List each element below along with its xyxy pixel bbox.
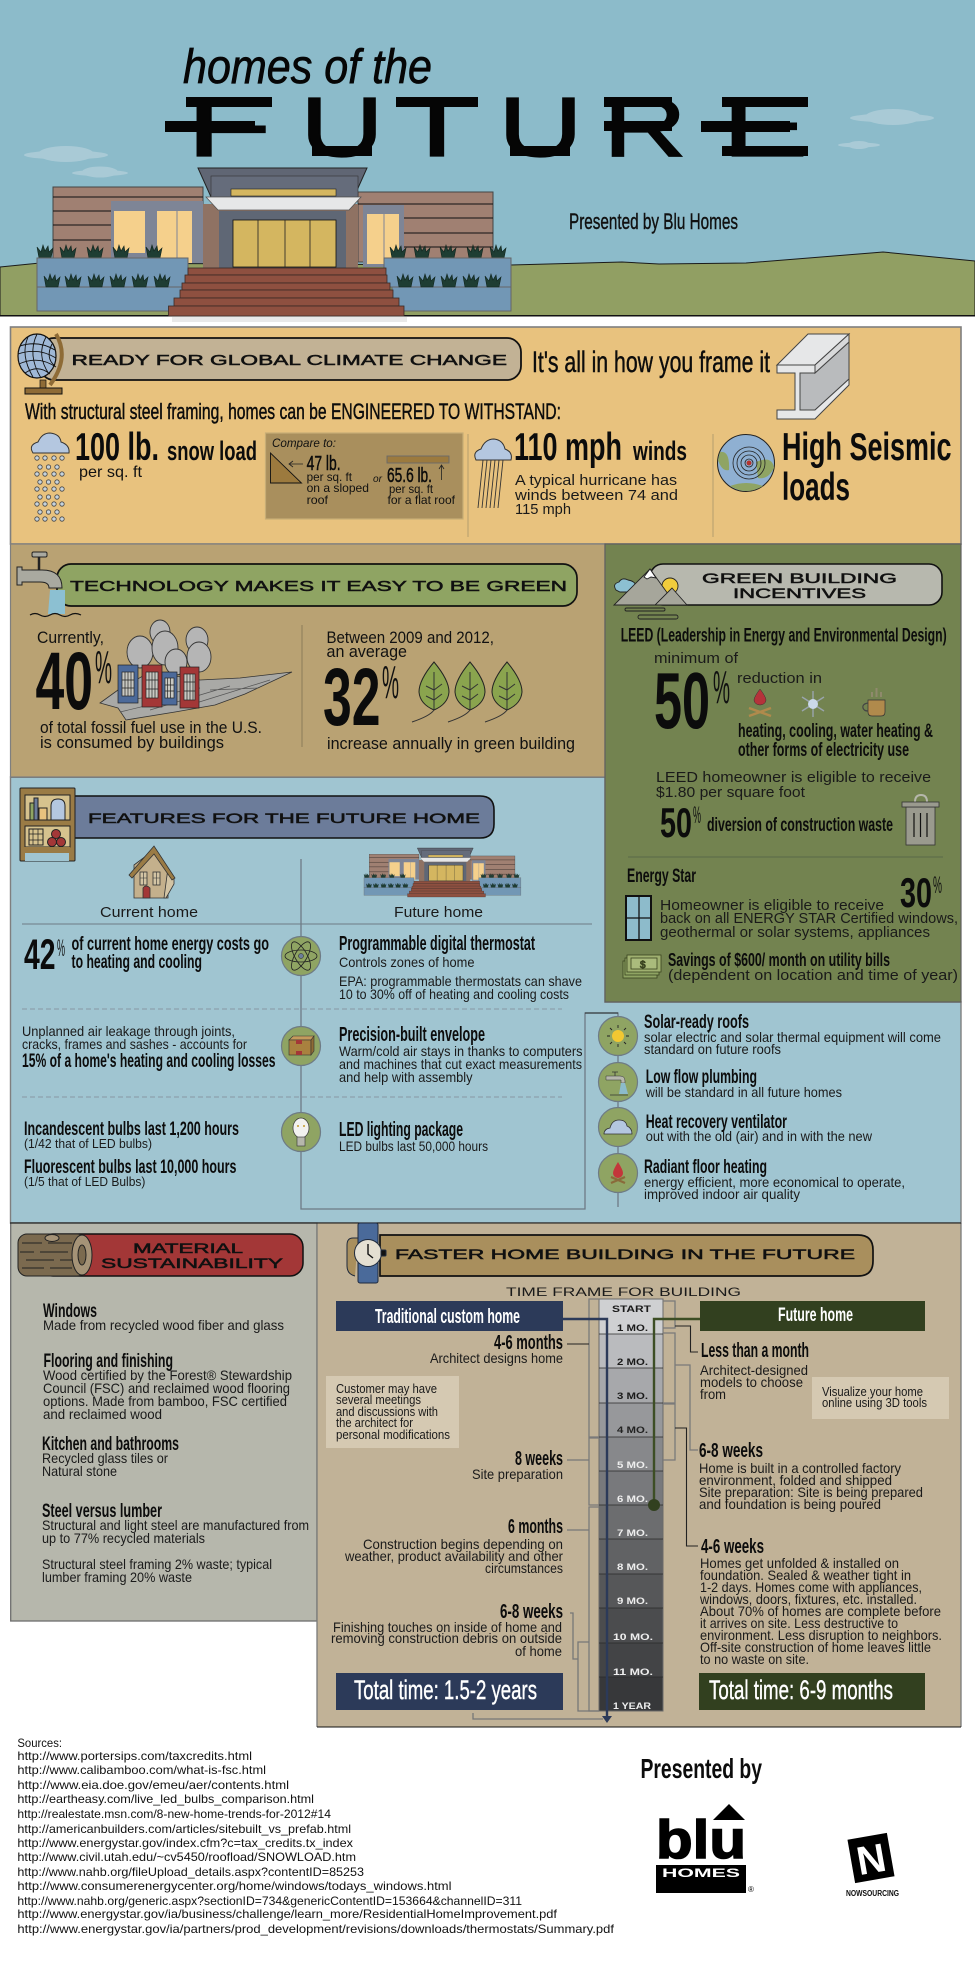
step: construction: Construction begins depending on [363, 1536, 563, 1552]
banner: green building incentives [650, 564, 942, 605]
logo: blu homes: blu [656, 1810, 746, 1870]
stat: 50 percent reduction: % [713, 661, 730, 713]
callout: customer meetings: Customer may have [336, 1381, 437, 1396]
stat: 32 percent green building: % [382, 656, 399, 708]
icon: snowflake [802, 691, 824, 717]
step: site preparation: 8 weeks [515, 1448, 563, 1470]
panel: technology makes it easy to be green [10, 544, 605, 777]
row: energy costs: % [57, 935, 65, 962]
step: factory build: Site preparation: Site is being prepared [699, 1484, 923, 1500]
feature: radiant floor heating: improved indoor air quality [644, 1186, 800, 1202]
row: air leakage: cracks, frames and sashes - accounts for [22, 1036, 247, 1052]
row: led lighting: LED bulbs last 50,000 hours [339, 1138, 488, 1154]
text: savings [668, 950, 958, 984]
icon: globe [18, 334, 62, 394]
item: flooring and finishing: options. Made from bamboo, FSC certified [43, 1393, 287, 1409]
item: flooring and finishing: Council (FSC) and reclaimed wood flooring [43, 1380, 290, 1396]
step: installation: foundation. Sealed & weather tight in [700, 1567, 911, 1583]
icon: fire [749, 689, 771, 716]
compare box: sloped vs flat roof: 65.6 lb. [387, 465, 432, 487]
energy star section: geothermal or solar systems, appliances [660, 924, 930, 941]
total time: traditional [336, 1673, 563, 1710]
row: thermostat: Controls zones of home [339, 954, 475, 970]
feature: heat recovery ventilator: Heat recovery ventilator [646, 1112, 787, 1133]
timeline column: 6 MO. [617, 1494, 648, 1504]
step: less than a month: from [700, 1386, 726, 1402]
item: kitchen and bathrooms [42, 1434, 179, 1479]
sources list [17, 1736, 615, 1936]
item: steel versus lumber: up to 77% recycled materials [42, 1530, 205, 1546]
icon: snow cloud [31, 433, 69, 521]
step: factory build: and foundation is being poured [699, 1496, 881, 1512]
step: installation: Off-site construction of home leaves little [700, 1639, 931, 1655]
compare box: sloped vs flat roof: Compare to: [272, 436, 336, 450]
tagline: It's all in how you frame it [532, 346, 770, 379]
icon: box circle [282, 1026, 320, 1066]
row: envelope: Precision-built envelope [339, 1024, 485, 1046]
step: installation: it arrives on site. Less destructive to [700, 1615, 898, 1631]
timeline column [599, 1299, 663, 1711]
stat: 110 mph winds: A typical hurricane has [515, 472, 677, 489]
timeline column: 1 YEAR [613, 1701, 652, 1711]
sources list: http://www.energystar.gov/index.cfm?c=tax_credits.tx_index [17, 1836, 353, 1850]
stat: 32 percent green building: increase annually in green building [327, 734, 575, 753]
title: FUTURE: R [603, 80, 687, 174]
callout: visualize online: online using 3D tools [822, 1395, 927, 1410]
row: led lighting: LED lighting package [339, 1119, 463, 1141]
stat: snow load: per sq. ft [79, 464, 143, 481]
item: kitchen and bathrooms: Recycled glass tiles or [42, 1450, 168, 1466]
timeline brackets [473, 1299, 698, 1719]
icon: watch [347, 1223, 386, 1283]
icon: shelf [20, 788, 75, 861]
banner: material sustainability [40, 1234, 303, 1276]
row: thermostat: 10 to 30% off of heating and cooling costs [339, 986, 569, 1002]
step: site preparation [472, 1448, 563, 1482]
row: air leakage: 15% of a home's heating and cooling losses [22, 1051, 276, 1072]
item: steel versus lumber [42, 1501, 309, 1585]
timeline column: START [612, 1304, 652, 1314]
feature: low flow plumbing: will be standard in all future homes [645, 1084, 842, 1100]
stat: snow load: 100 lb. [75, 426, 159, 469]
stat: 50 percent reduction: minimum of [654, 650, 739, 667]
logo: nowsourcing: N [853, 1836, 889, 1884]
banner: material sustainability: MATERIAL [133, 1240, 243, 1256]
timeline column: 9 MO. [617, 1596, 648, 1606]
step: construction: 6 months [508, 1516, 563, 1538]
row: thermostat: Programmable digital thermostat [339, 933, 535, 955]
banner: features [60, 796, 494, 838]
callout: visualize online [812, 1377, 949, 1419]
total time: future: Total time: 6-9 months [709, 1675, 893, 1705]
sources list: http://www.energystar.gov/ia/business/challenge/learn_more/ResidentialHomeImprovement.pdf [17, 1907, 558, 1921]
step: construction: weather, product availability and other [344, 1548, 563, 1564]
energy star section: 30 [900, 869, 932, 916]
step: finishing touches: removing construction debris on outside [331, 1630, 562, 1646]
row: envelope: and machines that cut exact measurements [339, 1056, 582, 1072]
banner: technology [57, 564, 577, 606]
stat: high seismic loads [718, 426, 952, 509]
label: current home: Current home [100, 904, 198, 921]
row: thermostat: EPA: programmable thermostats can shave [339, 973, 582, 989]
stat: high seismic loads: loads [782, 466, 850, 509]
sources list: http://www.civil.utah.edu/~cv5450/roofload/SNOWLOAD.htm [17, 1850, 356, 1864]
feature: low flow plumbing [645, 1067, 842, 1100]
stat: 110 mph winds: winds between 74 and [514, 487, 678, 504]
banner: material sustainability: SUSTAINABILITY [101, 1255, 284, 1271]
timeline column: 5 MO. [617, 1460, 648, 1470]
icon: earthquake globe [718, 434, 774, 492]
timeline column: 8 MO. [617, 1562, 648, 1572]
line: traditional timeline arrow [563, 1319, 612, 1723]
row: envelope: and help with assembly [339, 1069, 473, 1085]
banner: features: FEATURES FOR THE FUTURE HOME [88, 810, 480, 826]
row: bulbs: (1/5 that of LED Bulbs) [24, 1174, 145, 1189]
step: less than a month: models to choose [700, 1374, 803, 1390]
sources list: http://americanbuilders.com/articles/sitebuilt_vs_prefab.html [17, 1822, 351, 1836]
traditional home header [336, 1301, 563, 1331]
future home header [700, 1301, 925, 1331]
row: air leakage: Unplanned air leakage through joints, [22, 1023, 235, 1039]
step: less than a month: Less than a month [701, 1340, 809, 1362]
icon: rain cloud [475, 439, 511, 508]
stat: 32 percent green building: an average [326, 642, 407, 661]
icon: faucet circle [598, 1062, 638, 1102]
sources list: Sources: [17, 1736, 62, 1750]
icon: log [18, 1234, 92, 1276]
callout: customer meetings [326, 1376, 459, 1448]
stat: 110 mph winds: winds [632, 436, 687, 466]
energy star section [627, 866, 958, 941]
item: flooring and finishing [43, 1351, 292, 1422]
stat: 32 percent green building: 32 [323, 652, 380, 743]
logo: blu homes [656, 1804, 754, 1894]
item: flooring and finishing: Flooring and finishing [44, 1351, 173, 1372]
icon: future home [364, 848, 521, 897]
row: envelope: Warm/cold air stays in thanks to computers [339, 1043, 582, 1059]
title: FUTURE: T [396, 80, 478, 174]
compare box: sloped vs flat roof: per sq. ft [389, 482, 434, 496]
feature: radiant floor heating [644, 1157, 905, 1202]
header: sky and landscape [0, 0, 975, 322]
step: construction [344, 1516, 563, 1576]
stat: 40 percent fossil fuel: is consumed by buildings [40, 733, 224, 752]
row: bulbs [24, 1119, 239, 1189]
callout: customer meetings: and discussions with [336, 1404, 438, 1419]
step: finishing touches: 6-8 weeks [500, 1601, 563, 1623]
step: site preparation: Site preparation [472, 1466, 563, 1482]
item: windows: Made from recycled wood fiber and glass [43, 1317, 284, 1333]
ground hills [0, 252, 975, 316]
text: leed homeowner: LEED homeowner is eligible to receive [656, 769, 931, 786]
banner: faster home building [380, 1235, 873, 1276]
feature: heat recovery ventilator: out with the old (air) and in with the new [646, 1128, 873, 1144]
feature: solar-ready roofs [644, 1012, 941, 1057]
stat: 40 percent fossil fuel: Currently, [37, 628, 104, 647]
stat: 50 percent reduction: 50 [654, 656, 710, 745]
timeline column: 7 MO. [617, 1528, 648, 1538]
sources list: http://www.calibamboo.com/what-is-fsc.html [17, 1763, 266, 1777]
icon: bulb circle [282, 1112, 320, 1152]
step: installation: windows, doors, fixtures, etc. installed. [699, 1591, 917, 1607]
house illustration [37, 168, 511, 316]
step: finishing touches: of home [515, 1643, 562, 1659]
compare box: sloped vs flat roof [266, 433, 463, 519]
stat: 50 percent reduction [654, 650, 933, 761]
label: future home: Future home [394, 904, 483, 921]
icon: steel i-beam [777, 334, 849, 419]
icon: fire circle [598, 1154, 638, 1192]
panel: faster home building [10, 1223, 961, 1727]
step: less than a month [700, 1340, 809, 1402]
row: bulbs: Incandescent bulbs last 1,200 hours [24, 1119, 239, 1140]
sources list: http://www.portersips.com/taxcredits.html [17, 1749, 252, 1763]
title: FUTURE: E [722, 80, 808, 174]
sources list: http://www.energystar.gov/ia/partners/prod_development/revisions/downloads/thermostats/Summary.pdf [17, 1922, 615, 1936]
energy star section: back on all ENERGY STAR Certified windows, [660, 910, 958, 927]
energy star section: Energy Star [627, 866, 696, 887]
presented by heading: Presented by [640, 1753, 762, 1784]
step: installation: environment. Less disruption to neighbors. [700, 1627, 942, 1643]
sources list: http://www.nahb.org/generic.aspx?sectionID=734&genericContentID=153664&channelID=311 [17, 1894, 522, 1908]
item: steel versus lumber: Steel versus lumber [42, 1501, 162, 1522]
text: leed homeowner [656, 769, 931, 801]
icon: cloud circle [598, 1108, 638, 1146]
step: construction: circumstances [485, 1560, 563, 1576]
step: finishing touches: Finishing touches on inside of home and [333, 1619, 562, 1635]
item: steel versus lumber: Structural and light steel are manufactured from [42, 1517, 309, 1533]
logo: blu homes: HOMES [662, 1866, 740, 1880]
row: thermostat [339, 933, 582, 1002]
step: factory build: 6-8 weeks [699, 1440, 763, 1462]
banner: ready for global climate change [40, 338, 521, 380]
icon: trash can [902, 795, 939, 845]
stat: 50 percent diversion: % [693, 802, 701, 829]
step: installation: 4-6 weeks [701, 1536, 764, 1558]
text: savings: (dependent on location and time of year) [668, 967, 958, 984]
compare box: sloped vs flat roof: per sq. ft [307, 470, 353, 484]
compare box: sloped vs flat roof: on a sloped [307, 481, 369, 495]
stat: 40 percent fossil fuel: % [95, 641, 112, 693]
row: led lighting [339, 1119, 488, 1154]
compare box: sloped vs flat roof: roof [307, 493, 329, 507]
title: FUTURE: F [186, 80, 272, 174]
callout: visualize online: Visualize your home [822, 1384, 923, 1399]
line: future timeline marker [648, 1319, 700, 1511]
row: bulbs: Fluorescent bulbs last 10,000 hours [24, 1157, 236, 1178]
icon: atom circle [282, 936, 320, 976]
stat: 50 percent diversion [660, 799, 893, 846]
item: windows [43, 1301, 284, 1333]
step: installation: Homes get unfolded & installed on [700, 1555, 899, 1571]
stat: snow load [31, 426, 257, 521]
item: flooring and finishing: and reclaimed wood [43, 1406, 162, 1422]
row: envelope [339, 1024, 582, 1085]
logo: nowsourcing: NOWSOURCING [846, 1889, 899, 1898]
timeline column: 4 MO. [617, 1425, 648, 1435]
feature: low flow plumbing: Low flow plumbing [646, 1067, 757, 1088]
stat: 32 percent green building: Between 2009 and 2012, [326, 628, 494, 647]
step: installation: 1-2 days. Homes come with appliances, [700, 1579, 922, 1595]
sources list: http://www.nahb.org/fileUpload_details.aspx?contentID=85253 [17, 1865, 364, 1879]
step: factory build: Home is built in a controlled factory [699, 1460, 901, 1476]
step: installation: About 70% of homes are complete before [700, 1603, 941, 1619]
feature: radiant floor heating: energy efficient, more economical to operate, [644, 1174, 905, 1190]
compare box: sloped vs flat roof: for a flat roof [388, 493, 456, 507]
energy star section: Homeowner is eligible to receive [660, 897, 884, 914]
callout: customer meetings: the architect for [336, 1415, 414, 1430]
feature: heat recovery ventilator [646, 1112, 873, 1144]
item: kitchen and bathrooms: Natural stone [42, 1463, 117, 1479]
feature: solar-ready roofs: standard on future roofs [644, 1041, 781, 1057]
sources list: http://eartheasy.com/live_led_bulbs_comparison.html [17, 1792, 314, 1806]
banner: green building incentives: GREEN BUILDING [702, 570, 897, 586]
illustration: smoking buildings [100, 620, 292, 720]
icon: current home [129, 846, 175, 898]
row: air leakage [22, 1023, 276, 1072]
panel: green building incentives [605, 544, 961, 1002]
stat: 50 percent reduction: reduction in [737, 670, 822, 687]
total time: future [699, 1673, 925, 1710]
engineered to withstand heading: With structural steel framing, homes can be ENGINEERED TO WITHSTAND: [25, 399, 561, 424]
item: flooring and finishing: Wood certified by the Forest® Stewardship [43, 1367, 292, 1383]
callout: customer meetings: personal modifications [336, 1427, 450, 1442]
stat: snow load: snow load [167, 436, 257, 466]
text: leed homeowner: $1.80 per square foot [656, 784, 806, 801]
stat: 110 mph winds: 115 mph [515, 501, 571, 518]
icon: money [623, 955, 661, 978]
stat: 40 percent fossil fuel [36, 628, 262, 752]
banner: ready for global climate change: READY FOR GLOBAL CLIMATE CHANGE [72, 352, 507, 369]
logo: nowsourcing [846, 1833, 899, 1898]
step: finishing touches [331, 1601, 563, 1659]
stat: 40 percent fossil fuel: 40 [36, 636, 93, 727]
icon: coffee cup [863, 688, 885, 716]
energy star section: % [933, 872, 942, 899]
sources list: http://www.consumerenergycenter.org/home/windows/todays_windows.html [17, 1879, 452, 1893]
title: FUTURE: U [300, 80, 384, 174]
step: architect designs home: Architect designs home [430, 1350, 563, 1366]
panel: ready for global climate change [10, 327, 961, 544]
item: steel versus lumber: lumber framing 20% waste [42, 1569, 192, 1585]
title: homes of the: homes of the [183, 41, 432, 94]
step: installation [699, 1536, 942, 1667]
stat: 40 percent fossil fuel: of total fossil fuel use in the U.S. [40, 718, 262, 737]
panel: features for the future home [10, 777, 961, 1223]
sources list: http://www.eia.doe.gov/emeu/aer/contents.html [17, 1778, 289, 1792]
step: less than a month: Architect-designed [700, 1362, 808, 1378]
clouds [24, 109, 934, 178]
step: architect designs home [430, 1332, 563, 1366]
icon: faucet [17, 552, 81, 616]
banner: green building incentives: INCENTIVES [733, 585, 866, 601]
timeline column: 1 MO. [617, 1323, 648, 1333]
sources list: http://realestate.msn.com/8-new-home-trends-for-2012#14 [17, 1807, 331, 1821]
compare box: sloped vs flat roof: 47 lb. [307, 453, 341, 475]
banner: faster home building: FASTER HOME BUILDING IN THE FUTURE [395, 1246, 855, 1262]
timeline column: 10 MO. [613, 1632, 653, 1642]
row: bulbs: (1/42 that of LED bulbs) [24, 1136, 152, 1151]
chart heading: TIME FRAME FOR BUILDING [506, 1285, 741, 1299]
item: kitchen and bathrooms: Kitchen and bathrooms [42, 1434, 179, 1455]
timeline column: 3 MO. [617, 1391, 648, 1401]
feature: solar-ready roofs: Solar-ready roofs [644, 1012, 749, 1033]
banner: technology: TECHNOLOGY MAKES IT EASY TO BE GREEN [70, 578, 567, 595]
feature: solar-ready roofs: solar electric and solar thermal equipment will come [644, 1029, 941, 1045]
timeline column: 11 MO. [613, 1667, 653, 1677]
callout: customer meetings: several meetings [336, 1392, 421, 1407]
stat: 32 percent green building [323, 628, 575, 753]
compare box: sloped vs flat roof: or [373, 474, 383, 485]
presented by blu homes: Presented by Blu Homes [569, 209, 738, 234]
panel: material sustainability [11, 1223, 317, 1621]
icon: mountains [614, 569, 687, 619]
item: steel versus lumber: Structural steel framing 2% waste; typical [42, 1556, 272, 1572]
icon: window [626, 896, 651, 940]
stat: 50 percent diversion: 50 [660, 799, 692, 846]
timeline column: 2 MO. [617, 1357, 648, 1367]
step: factory build [699, 1440, 923, 1512]
feature: radiant floor heating: Radiant floor heating [644, 1157, 767, 1178]
stat: 110 mph winds: 110 mph [514, 426, 622, 469]
step: architect designs home: 4-6 months [494, 1332, 563, 1354]
logo: blu homes: ® [748, 1885, 754, 1894]
item: windows: Windows [43, 1301, 97, 1322]
traditional home header: Traditional custom home [375, 1306, 520, 1328]
future home header: Future home [778, 1305, 853, 1326]
icon: three leaves [412, 662, 522, 722]
step: factory build: environment, folded and shipped [699, 1472, 892, 1488]
row: energy costs: to heating and cooling [72, 952, 202, 973]
row: energy costs: 42 [24, 931, 56, 979]
total time: traditional: Total time: 1.5-2 years [354, 1675, 537, 1705]
row: energy costs: of current home energy costs go [72, 934, 269, 955]
row: energy costs [24, 931, 269, 979]
icon: money: $ [640, 960, 646, 971]
title: FUTURE [165, 80, 808, 174]
title: FUTURE: U [498, 80, 583, 174]
icon: sun circle [598, 1016, 638, 1056]
step: installation: to no waste on site. [700, 1651, 809, 1667]
stat: 110 mph winds [475, 426, 687, 518]
